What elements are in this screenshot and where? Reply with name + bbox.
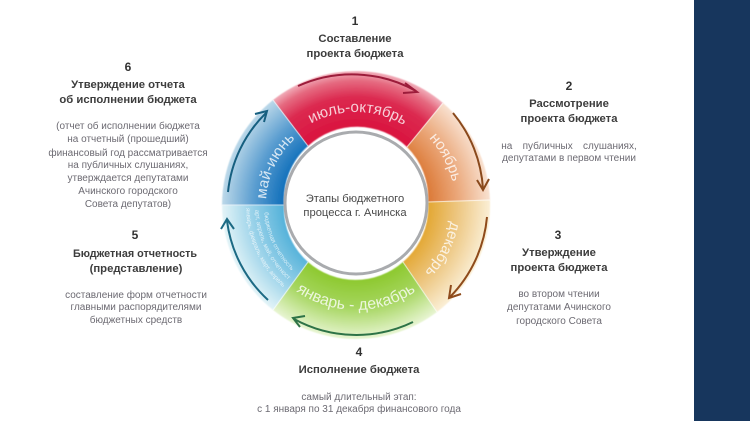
segment: orange, November <box>406 103 490 202</box>
stage 1 text: проекта бюджета <box>307 48 404 60</box>
arrow: light blue segment <box>221 219 268 300</box>
stage 4 text: самый длительный этап: <box>301 392 417 403</box>
stage 6 text: Утверждение отчета <box>71 79 186 91</box>
segment: red, July-October <box>272 70 444 148</box>
stage 3 text: депутатами Ачинского <box>507 302 611 313</box>
stage 5 text: главными распорядителями <box>71 302 201 313</box>
segment: red, July-October: июль-октябрь <box>308 104 405 124</box>
center circle: process title: Этапы бюджетного <box>306 193 404 205</box>
stage 2 text: Рассмотрение <box>529 98 609 110</box>
stage 6 text: Ачинского городского <box>78 186 178 197</box>
stage 3 text: во втором чтении <box>518 289 600 300</box>
segment: light blue, reporting period: март, апрель, май, отчетность <box>254 210 290 279</box>
stage 3 text: 3 <box>555 228 562 242</box>
stage 1 text: 1 <box>352 14 359 28</box>
segment: yellow, December: декабрь <box>426 220 458 274</box>
arrow: green segment <box>293 316 413 335</box>
stage 3 text: городского Совета <box>516 316 602 327</box>
stage 6 text: финансовый год рассматривается <box>48 147 208 159</box>
stage 5 text: (представление) <box>90 263 183 275</box>
stage 6 text <box>48 60 208 210</box>
stage 6 text: (отчет об исполнении бюджета <box>56 120 200 132</box>
stage 6 text: на отчетный (прошедший) <box>67 134 189 145</box>
stage 6 text: 6 <box>125 60 132 74</box>
segment: light blue, reporting period <box>222 204 308 310</box>
stage 5 text <box>65 228 207 326</box>
stage 1 text <box>307 14 404 60</box>
center circle: process title: процесса г. Ачинска <box>303 207 407 219</box>
segment: yellow, December <box>402 200 490 312</box>
arrow: red segment <box>298 74 417 93</box>
stage 5 text: 5 <box>132 228 139 242</box>
stage 4 text: Исполнение бюджета <box>299 364 420 376</box>
budget cycle ring diagram <box>220 70 490 340</box>
segment: blue, May-June: май-июнь <box>258 136 294 198</box>
stage 1 text: Составление <box>318 33 392 45</box>
segment: light blue, reporting period: бюджетная отчетность <box>264 212 292 270</box>
stage 4 text <box>257 345 461 415</box>
stage 2 text: 2 <box>566 79 573 93</box>
segment: green, January-December <box>273 262 437 340</box>
stage 2 text: на публичных слушаниях, <box>501 140 637 152</box>
stage 6 text: Совета депутатов) <box>85 199 171 210</box>
stage 6 text: на публичных слушаниях, <box>68 159 188 171</box>
arrow: blue segment <box>228 111 267 192</box>
stage 6 text: утверждается депутатами <box>68 173 188 184</box>
stage 2 text: проекта бюджета <box>521 113 618 125</box>
stage 4 text: с 1 января по 31 декабря финансового года <box>257 403 461 415</box>
stage 4 text: 4 <box>356 345 363 359</box>
side panel: dark blue band <box>694 0 750 421</box>
segment: orange, November: ноябрь <box>430 134 459 181</box>
stage 5 text: бюджетных средств <box>90 314 182 326</box>
stage 3 text: проекта бюджета <box>511 262 608 274</box>
segment: blue, May-June <box>222 100 308 206</box>
arrow: yellow segment <box>449 217 487 298</box>
stage 3 text: Утверждение <box>522 247 596 259</box>
stage 5 text: составление форм отчетности <box>65 289 207 301</box>
arrow: orange segment <box>453 113 489 190</box>
segment: green, January-December: январь - декабрь <box>296 286 414 314</box>
stage 5 text: Бюджетная отчетность <box>73 248 197 260</box>
center circle: process title <box>285 132 427 274</box>
stage 2 text <box>501 79 637 164</box>
stage 2 text: депутатами в первом чтении <box>502 153 636 164</box>
segment: light blue, reporting period: январь, февраль, март, апрель <box>246 208 284 287</box>
stage 3 text <box>507 228 611 327</box>
stage 6 text: об исполнении бюджета <box>59 94 197 106</box>
